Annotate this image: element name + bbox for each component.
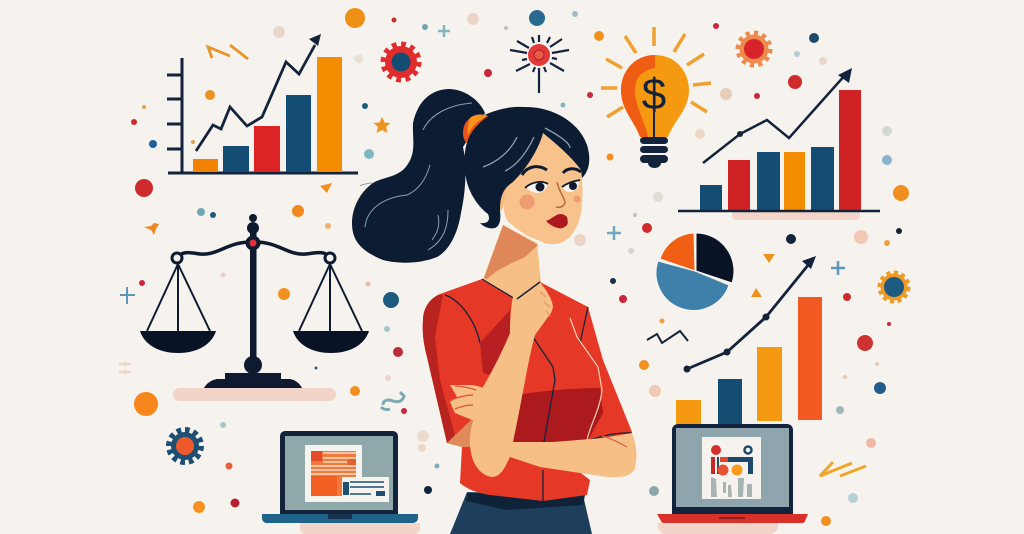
hair tie	[463, 115, 488, 143]
hand on arm	[450, 385, 487, 422]
ear	[484, 182, 507, 210]
ponytail	[352, 89, 485, 263]
lips	[546, 214, 568, 228]
bar chart: lower right	[676, 256, 822, 424]
eyebrows and eyes	[522, 167, 581, 175]
laptop: left	[262, 431, 420, 534]
scattered confetti dots	[119, 8, 909, 526]
neck	[483, 225, 541, 302]
pie chart	[656, 233, 734, 310]
crossed arm lower	[510, 433, 636, 477]
pants	[450, 492, 592, 534]
icon: orange gear	[738, 34, 770, 64]
icon: red gear	[384, 45, 418, 79]
icon: blue and orange gear right	[880, 273, 908, 301]
shirt	[423, 279, 632, 501]
icon: scales of justice	[140, 214, 369, 401]
raised arm and hand	[470, 282, 553, 477]
bar chart: top left	[167, 34, 358, 173]
face	[504, 133, 582, 244]
laptop: right	[657, 424, 808, 534]
bar chart: top right	[678, 68, 880, 220]
elbow shadow	[447, 418, 473, 447]
icon: sunburst	[510, 35, 569, 93]
icon: lightbulb with dollar sign: $	[642, 70, 666, 119]
icon: navy gear lower left	[170, 430, 200, 462]
icon: orange squiggle lines	[820, 462, 866, 476]
head hair	[464, 107, 589, 228]
icon: lightbulb with dollar sign	[601, 27, 711, 168]
woman	[352, 89, 636, 534]
